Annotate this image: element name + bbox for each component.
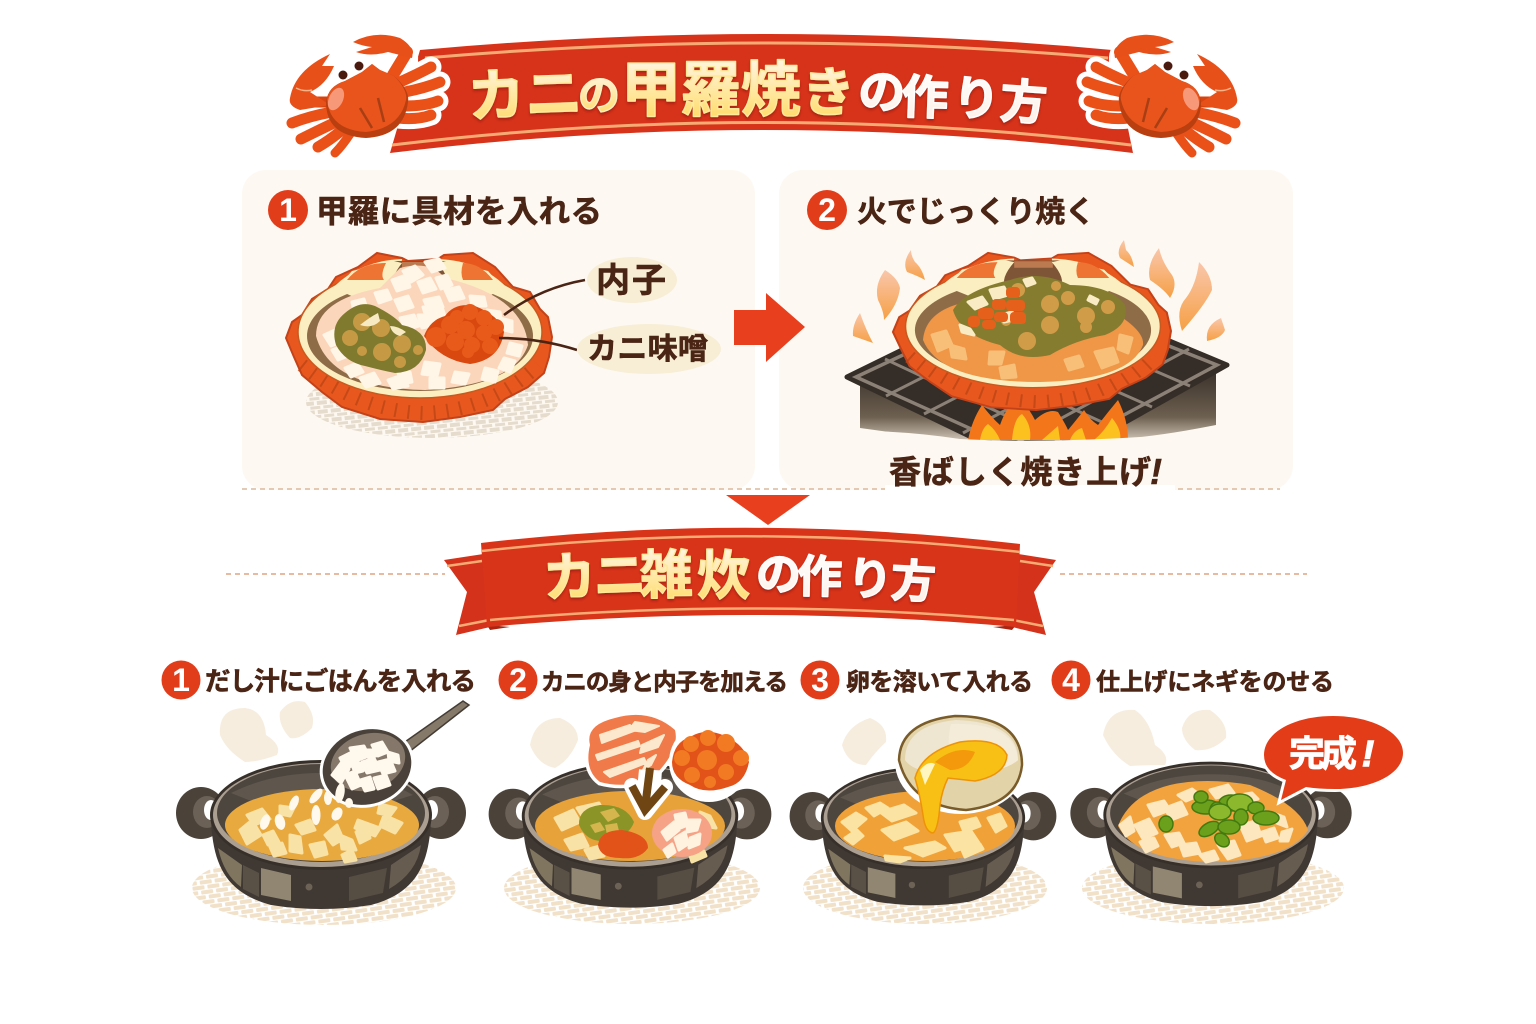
step 1 label: だし汁にごはんを入れる xyxy=(205,667,476,696)
crab flesh in soup xyxy=(652,809,712,857)
falling rice xyxy=(258,782,353,831)
callout: crab miso xyxy=(577,324,721,374)
title text xyxy=(466,57,1049,130)
step 2 heading: 火でじっくり焼く xyxy=(857,196,1095,229)
crab meat sticker xyxy=(588,715,676,785)
callout: meat roe xyxy=(587,257,677,303)
title text: カニ雑炊 xyxy=(542,546,750,609)
step 2 heading: 2 xyxy=(818,192,836,228)
icon: left crab xyxy=(290,30,440,153)
step 1 label: 1 xyxy=(172,662,190,698)
step 2 label: 2 xyxy=(509,662,527,698)
leader lines xyxy=(499,280,585,350)
step 3 label: 3 xyxy=(811,662,829,698)
pot xyxy=(790,767,1056,905)
caption: 香ばしく焼き上げ xyxy=(889,454,1151,490)
green miso in soup xyxy=(579,805,634,841)
placemat xyxy=(504,852,760,924)
arrow: down xyxy=(726,495,810,525)
placemat xyxy=(192,851,456,925)
ribbon xyxy=(390,34,1133,153)
cooked crab shell xyxy=(893,253,1171,410)
grill base cover xyxy=(845,420,1240,489)
step 2 label xyxy=(498,660,788,700)
step 4 label: 仕上げにネギをのせる xyxy=(1096,669,1334,696)
orange miso in soup xyxy=(598,830,648,858)
steam xyxy=(530,718,578,768)
illustration: pot 2 add crab meat and roe xyxy=(489,715,771,924)
step 2 label: カニの身と内子を加える xyxy=(541,669,788,695)
title text: の xyxy=(578,72,620,119)
steam xyxy=(220,701,313,762)
arrow down sticker xyxy=(632,770,665,812)
title text: カニ xyxy=(466,62,583,130)
soup xyxy=(835,791,1015,861)
ribbon main xyxy=(481,528,1020,627)
yolk xyxy=(915,741,1007,833)
soup xyxy=(225,789,419,861)
callout: crab miso: カニ味噌 xyxy=(587,333,708,366)
grill xyxy=(847,285,1227,470)
roe sticker xyxy=(669,722,749,802)
title text xyxy=(542,546,937,609)
speech bubble: 完成 xyxy=(1289,733,1357,774)
pot xyxy=(176,760,466,909)
banner: crab gratin title xyxy=(390,34,1133,153)
step 1 heading: 1 xyxy=(279,192,297,228)
speech bubble: ! xyxy=(1362,733,1374,774)
illustration: pot 3 add egg xyxy=(790,710,1056,924)
callout: meat roe: 内子 xyxy=(596,262,666,300)
steam xyxy=(1103,710,1226,766)
panel: step 1 fill the shell xyxy=(242,170,755,490)
title text: 甲羅焼 xyxy=(621,57,801,124)
speech bubble xyxy=(1264,716,1403,800)
pot xyxy=(1070,762,1352,906)
heat wisps xyxy=(853,240,1225,343)
step 4 label xyxy=(1052,660,1334,700)
arrow: right xyxy=(734,293,805,362)
placemat xyxy=(803,852,1047,924)
egg bowl xyxy=(895,710,1027,833)
green onions xyxy=(1159,791,1279,850)
soup xyxy=(535,791,725,861)
step 2 heading xyxy=(807,190,1095,230)
shadow under shell xyxy=(306,366,558,438)
illustration: pot 4 finished xyxy=(1070,710,1403,924)
title text: の作り方 xyxy=(858,65,1049,130)
title text: の作り方 xyxy=(756,549,937,608)
steam xyxy=(842,718,886,765)
caption: ! xyxy=(1150,451,1162,492)
step 1 heading: 甲羅に具材を入れる xyxy=(316,193,602,229)
ribbon tails xyxy=(444,553,1056,635)
pot xyxy=(489,762,771,908)
icon: right crab xyxy=(1087,30,1237,153)
illustration: pot 1 add rice xyxy=(176,701,469,925)
step 1 label xyxy=(162,660,476,700)
ladle xyxy=(309,701,469,820)
flames under grill xyxy=(968,398,1128,440)
banner: crab porridge title xyxy=(444,528,1056,635)
illustration: filled crab shell xyxy=(286,253,552,422)
step 4 label: 4 xyxy=(1062,662,1080,698)
step 3 label: 卵を溶いて入れる xyxy=(846,669,1033,696)
title text: き xyxy=(802,64,855,123)
step 3 label xyxy=(800,660,1033,700)
panel: step 2 grill xyxy=(779,170,1293,493)
porridge xyxy=(1118,781,1308,862)
placemat xyxy=(1082,852,1344,924)
